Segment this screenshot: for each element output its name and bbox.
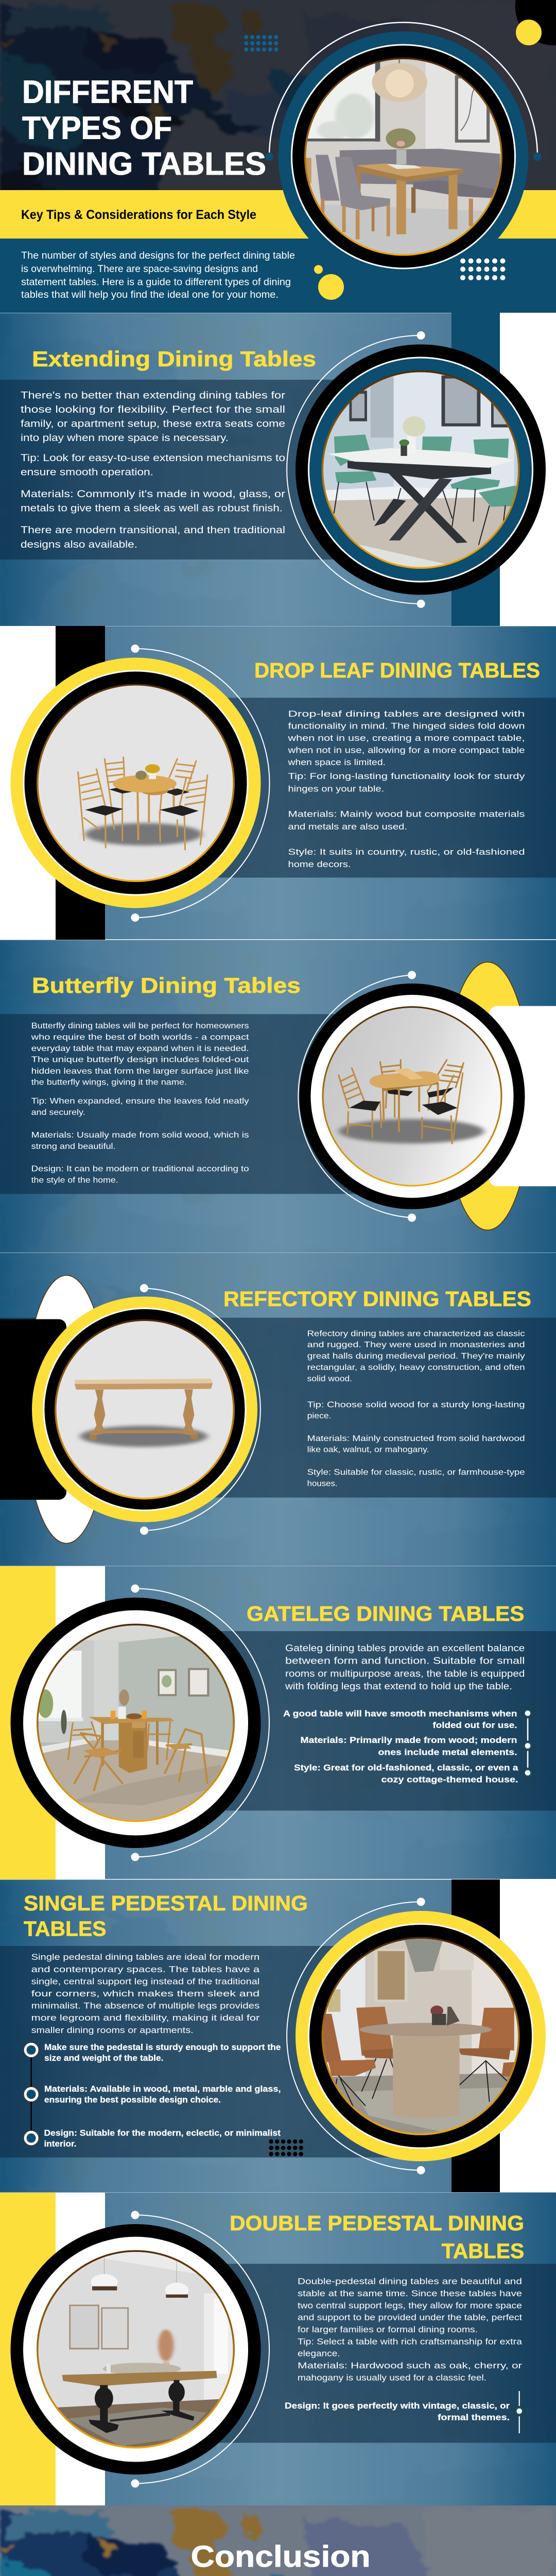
body text: Style: Suitable for classic, rustic, or farmhouse-type [307, 1468, 525, 1477]
decoration: black corner circle [515, 0, 556, 45]
panel: gateleg dining tables [0, 1566, 556, 1879]
decoration: white arc with end dots [265, 23, 542, 161]
body text: those looking for flexibility. Perfect for the small [21, 404, 285, 415]
key point: formal themes. [438, 2412, 510, 2422]
body text: Style: It suits in country, rustic, or old-fashioned [288, 847, 525, 857]
body text [31, 1952, 260, 2035]
body text: like oak, walnut, or mahogany. [307, 1446, 429, 1454]
photo frame rings [296, 1911, 546, 2161]
body text: Design: It can be modern or traditional according to [31, 1165, 249, 1174]
arc connector [131, 2211, 269, 2487]
body text: more legroom and flexibility, making it ideal for [31, 2013, 260, 2023]
body text: elegance. [298, 2349, 340, 2359]
body text: the style of the home. [31, 1176, 118, 1184]
heading: TABLES [442, 2239, 524, 2263]
timeline markers [523, 1708, 532, 1777]
photo: single pedestal table with leather chairs [319, 1935, 525, 2140]
body text: designs also available. [21, 539, 137, 550]
intro text: The number of styles and designs for the perfect dining table [21, 250, 295, 261]
decoration: teal dot grid [244, 35, 278, 52]
key point: Design: It goes perfectly with vintage, classic, or [285, 2401, 510, 2411]
decoration: yellow circles [314, 265, 344, 300]
key points: size and weight of the table. [44, 2053, 164, 2063]
intro text: tables that will help you find the ideal one for your home. [21, 290, 279, 300]
photo frame rings [32, 1296, 257, 1522]
body text: for larger families or formal dining rooms. [298, 2325, 478, 2334]
body text: Materials: Hardwood such as oak, cherry, or [298, 2361, 522, 2370]
heading: SINGLE PEDESTAL DINING [24, 1891, 308, 1915]
key points: Style: Great for old-fashioned, classic, or even a [294, 1763, 518, 1772]
arc connector [298, 971, 416, 1222]
intro text: is overwhelming. There are space-saving designs and [21, 264, 258, 275]
panel: conclusion [0, 2505, 556, 2576]
body text: Butterfly dining tables will be perfect for homeowners [31, 1022, 249, 1030]
body text: and rugged. They were used in monasteries and [307, 1341, 525, 1349]
body text: Single pedestal dining tables are ideal for modern [31, 1952, 259, 1962]
photo frame rings [10, 1598, 260, 1848]
body text: metals to give them a sleek as well as robust finish. [21, 503, 283, 514]
key points: Materials: Primarily made from wood; modern [301, 1735, 517, 1745]
arc connector [287, 1897, 425, 2174]
heading: Extending Dining Tables [32, 347, 316, 371]
body text: with folding legs that extend to hold up the table. [285, 1681, 512, 1691]
body text: great halls during medieval period. They're mainly [307, 1352, 525, 1361]
body text: minimalist. The absence of multiple legs provides [31, 2001, 259, 2011]
body text: Materials: Usually made from solid wood, which is [31, 1131, 249, 1140]
body text: rooms or multipurpose areas, the table is equipped [285, 1669, 525, 1679]
photo: refectory table [54, 1319, 235, 1500]
arc connector [287, 331, 425, 608]
key points: Make sure the pedestal is sturdy enough to support the [44, 2042, 281, 2052]
body text: Refectory dining tables are characterized as classic [307, 1329, 525, 1338]
body text: and securely. [31, 1108, 85, 1117]
timeline markers [24, 2042, 39, 2145]
title [22, 75, 266, 182]
key points: ensuring the best possible design choice. [44, 2095, 221, 2105]
heading: DROP LEAF DINING TABLES [254, 658, 540, 682]
key point [285, 2401, 510, 2422]
body text: Drop-leaf dining tables are designed with [288, 709, 525, 719]
intro text [21, 250, 295, 300]
body text [298, 2277, 523, 2382]
subtitle: Key Tips & Considerations for Each Style [21, 208, 256, 222]
body text: Tip: For long-lasting functionality look for sturdy [288, 771, 525, 781]
photo frame rings [10, 2224, 260, 2475]
white ellipse behind photo [25, 1276, 108, 1544]
arc connector [131, 1584, 269, 1861]
body text: ensure smooth operation. [21, 467, 153, 478]
body text: Tip: Select a table with rich craftsmanship for extra [298, 2336, 523, 2346]
panel: extending dining tables [0, 313, 556, 626]
body text: Materials: Commonly it's made in wood, glass, or [21, 489, 286, 500]
body text [285, 1643, 525, 1691]
body text: two central support legs, they allow for more space [298, 2300, 522, 2310]
body text: who require the best of both worlds - a compact [30, 1033, 249, 1042]
body text [287, 709, 525, 869]
body text: hinges on your table. [288, 784, 384, 794]
body text: and metals are also used. [288, 822, 407, 832]
panel: hero header [0, 0, 556, 313]
body text: There are modern transitional, and then traditional [21, 525, 285, 536]
body text: smaller dining rooms or apartments. [31, 2025, 194, 2035]
key points: A good table will have smooth mechanisms when [283, 1708, 517, 1718]
body text: Double-pedestal dining tables are beautiful and [298, 2277, 522, 2286]
key points: interior. [44, 2139, 76, 2149]
key points [44, 2042, 281, 2149]
body text: Materials: Mainly constructed from solid hardwood [307, 1434, 525, 1443]
title: DINING TABLES [22, 146, 266, 182]
intro text: statement tables. Here is a guide to different types of dining [21, 277, 291, 287]
heading: GATELEG DINING TABLES [247, 1602, 524, 1625]
body text: There's no better than extending dining tables for [21, 390, 286, 401]
body text: and contemporary spaces. The tables have a [31, 1964, 260, 1974]
key points [283, 1708, 518, 1784]
heading: Conclusion [191, 2540, 371, 2573]
panel: double pedestal dining tables [0, 2192, 556, 2506]
body text [30, 1022, 249, 1184]
body text: functionality in mind. The hinged sides fold down [288, 721, 525, 731]
title: DIFFERENT [22, 75, 193, 110]
panel: butterfly dining tables [0, 940, 556, 1253]
heading: DOUBLE PEDESTAL DINING [230, 2211, 524, 2235]
body text: rectangular, a solidly, heavy construction, and often [307, 1363, 525, 1372]
panel: refectory dining tables [0, 1252, 556, 1566]
decoration: white dot grid [460, 259, 506, 280]
body text: Tip: Look for easy-to-use extension mechanisms to [21, 453, 285, 464]
heading [230, 2211, 524, 2263]
body text: into play when more space is necessary. [21, 433, 229, 444]
body text: everyday table that may expand when it is needed. [31, 1044, 249, 1053]
body text: mahogany is usually used for a classic feel. [298, 2372, 486, 2382]
body text: when not in use, allowing for a more compact table [287, 745, 525, 755]
body text: and support to be provided under the table, perfect [298, 2313, 522, 2323]
timeline marker [514, 2391, 524, 2433]
photo: extending table with green chairs [319, 368, 525, 572]
body text: when space is limited. [287, 757, 386, 767]
body text: The unique butterfly design includes folded-out [31, 1056, 249, 1064]
black rounded block [0, 1319, 66, 1500]
heading: TABLES [24, 1917, 106, 1940]
photo frame: hero rings [278, 31, 528, 282]
key points: folded out for use. [432, 1720, 517, 1730]
body text: between form and function. Suitable for small [285, 1656, 525, 1666]
key points: ones include metal elements. [378, 1747, 517, 1757]
photo: gateleg table in bright room [36, 1623, 237, 1824]
body text: four corners, which makes them sleek and [31, 1989, 259, 1998]
heading: REFECTORY DINING TABLES [223, 1287, 531, 1311]
title: TYPES OF [22, 111, 172, 146]
photo: butterfly table and chairs [322, 1005, 503, 1188]
photo frame rings [300, 984, 525, 1209]
decoration: black dot grid [269, 2139, 303, 2156]
panel: single pedestal dining tables [0, 1879, 556, 2193]
arc connector [131, 645, 270, 922]
decoration: yellow circle top right [516, 20, 542, 45]
body text: Tip: When expanded, ensure the leaves fold neatly [31, 1097, 249, 1106]
body text: Gateleg dining tables provide an excellent balance [285, 1643, 525, 1653]
body text: the butterfly wings, giving it the name. [31, 1078, 187, 1087]
body text: when not in use, creating a more compact table, [287, 733, 525, 743]
heading [24, 1891, 308, 1940]
key points: Design: Suitable for the modern, eclectic, or minimalist [44, 2128, 281, 2138]
photo: dining nook with grey bench [304, 57, 507, 258]
photo: drop leaf table and four chairs [36, 683, 237, 884]
body text: single, central support leg instead of the traditional [31, 1976, 259, 1987]
key points: Materials: Available in wood, metal, marble and glass, [44, 2084, 281, 2094]
body text: stable at the same time. Since these tables have [298, 2289, 522, 2298]
yellow ellipse behind photo [444, 962, 531, 1230]
body text [307, 1329, 525, 1488]
body text: hidden leaves that form the larger surface just like [31, 1067, 249, 1076]
body text: family, or apartment setup, these extra seats come [21, 418, 285, 429]
photo frame rings [296, 344, 546, 595]
white rounded block [489, 1006, 556, 1186]
body text [21, 390, 286, 550]
body text: solid wood. [307, 1375, 352, 1383]
body text: strong and beautiful. [31, 1142, 116, 1151]
body text: home decors. [288, 859, 351, 869]
panel: drop leaf dining tables [0, 626, 556, 940]
body text: houses. [307, 1480, 338, 1488]
heading: Butterfly Dining Tables [32, 973, 301, 997]
body text: Materials: Mainly wood but composite materials [288, 809, 525, 819]
body text: piece. [307, 1412, 332, 1420]
photo: double pedestal table in white room [36, 2249, 237, 2450]
key points: cozy cottage-themed house. [381, 1774, 518, 1784]
arc connector [140, 1284, 260, 1535]
body text: Tip: Choose solid wood for a sturdy long-lasting [307, 1400, 525, 1409]
photo frame rings [10, 657, 260, 908]
